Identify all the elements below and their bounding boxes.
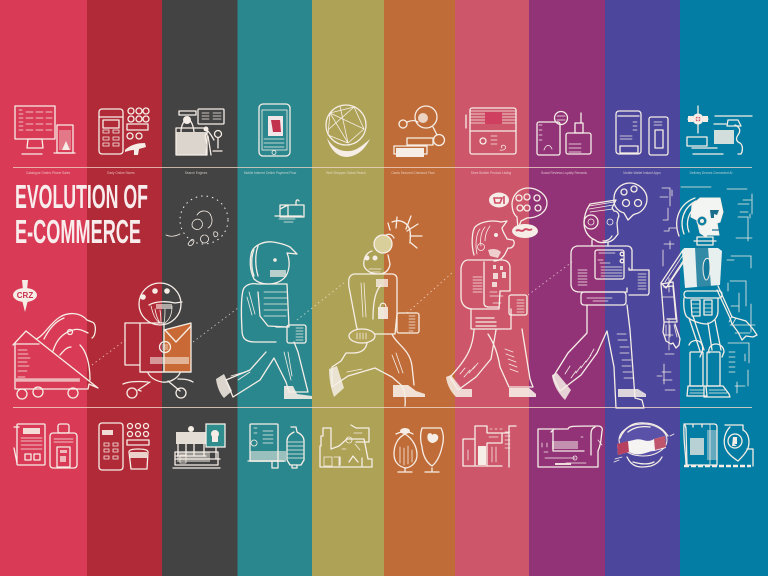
speech bubble [614, 183, 647, 220]
speech bubbles [489, 188, 547, 238]
icon: smartphone with shop page [259, 104, 290, 156]
icon: app screen with widgets [99, 108, 149, 155]
captions under upper icons: Store Builder Product Listing [471, 171, 511, 175]
icon: newsstand and luggage [14, 424, 77, 468]
captions under upper icons: Search Engines [185, 171, 208, 175]
captions under upper icons: Early Online Stores [107, 171, 135, 175]
icon: desktop monitor and phone [15, 106, 75, 154]
icon: wireframe globe [326, 105, 370, 157]
captions under upper icons: Web Shopper Global Reach [326, 171, 366, 175]
figure: walking person with speech bubbles [446, 188, 547, 397]
icon: drone and delivery stack [687, 106, 752, 154]
icon: two goblets [394, 428, 443, 472]
icon: downtown buildings [463, 426, 516, 467]
figure: robot [661, 198, 757, 397]
circuit board lines [657, 187, 755, 393]
icon: scroll and credit card [538, 426, 602, 467]
title [15, 178, 148, 250]
captions under upper icons: Delivery Drones Connected AI [690, 171, 732, 175]
icon: network with bank cards [394, 106, 444, 157]
icon: compass badge: CRZ [17, 291, 33, 300]
icon: phone and coffee cup [99, 423, 149, 470]
icon: device tree and terminal [537, 112, 591, 155]
captions under upper icons: Mobile Wallet Instant Apps [623, 171, 661, 175]
icon: city map plan [320, 425, 372, 467]
icon: location pin and storefront stack [684, 424, 753, 466]
icon: tablet and phone [616, 111, 668, 155]
captions under upper icons: Cards Secured Checkout Flow [391, 171, 435, 175]
icon: storefront register [466, 108, 516, 154]
figure: pyramid with wave [13, 280, 98, 399]
divider: upper timeline [13, 166, 752, 168]
divider: lower timeline [13, 406, 752, 408]
captions under upper icons [26, 171, 732, 175]
figure: walking person, olive and orange band [329, 235, 425, 406]
dotted thought circle [166, 196, 228, 246]
captions under upper icons: Mobile Internet Online Payment Flow [244, 171, 297, 175]
captions under upper icons: Social Reviews Loyalty Rewards [541, 171, 587, 175]
icon: hands exchanging ticket [614, 423, 674, 467]
title: EVOLUTION OF [15, 178, 148, 215]
figure: walking shopper, teal band [216, 242, 312, 399]
icon: web dashboard and server canister [248, 424, 304, 468]
icon: kiosk sign [275, 200, 304, 222]
figure: half robot walking [552, 183, 649, 408]
title: E-COMMERCE [15, 213, 141, 250]
captions under upper icons: Catalogue Orders Phone Sales [26, 171, 70, 175]
dotted walking path [92, 262, 572, 365]
icon: shopfront with laptop [173, 424, 225, 468]
icon: shop clerk with counter [176, 109, 224, 155]
figure: seated person in office chair [123, 283, 193, 398]
icon: light bulb rays [385, 216, 422, 248]
